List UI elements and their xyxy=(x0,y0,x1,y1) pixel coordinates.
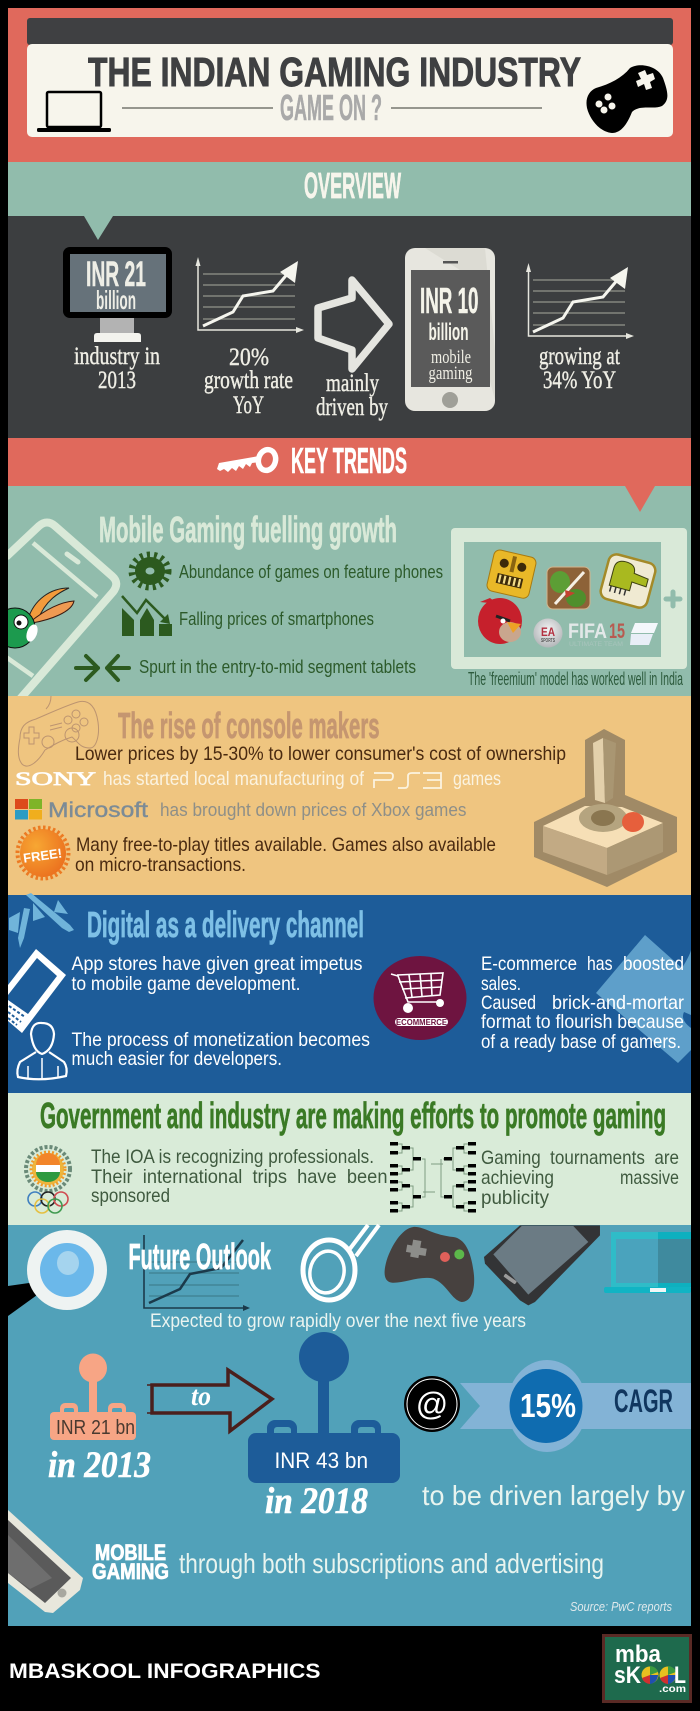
icon: monitor with INR 21 billion xyxy=(63,247,172,342)
icon: falling prices xyxy=(122,596,172,636)
text: free to play: on micro-transactions. xyxy=(75,854,246,876)
icon: doodle jump xyxy=(599,553,657,609)
large joystick 2018: INR 43 bn xyxy=(274,1448,368,1473)
logo: mbaskool xyxy=(604,1636,690,1702)
source note: Source: PwC reports xyxy=(570,1599,672,1614)
text: growing at 34% YoY: growing at xyxy=(539,343,620,370)
text: driven by: to be driven largely by xyxy=(422,1480,685,1511)
text: industry in 2013 xyxy=(74,343,160,394)
text: lower prices: Lower prices by 15-30% to lower consumer's cost of ownership xyxy=(75,743,566,765)
text: 20% growth rate YoY: 20% xyxy=(229,344,269,371)
panel: government and industry xyxy=(8,1093,691,1225)
heading: mobile gaming: Mobile Gaming fuelling growth xyxy=(99,509,397,550)
heading: future outlook: Future Outlook xyxy=(128,1236,272,1277)
icon: smartphone with INR 10 billion xyxy=(405,248,495,411)
tablet with game icons xyxy=(451,528,687,669)
icon: joystick xyxy=(534,729,677,887)
text: expected: Expected to grow rapidly over the next five years xyxy=(150,1310,526,1332)
icon: EA fifa logo: FIFA xyxy=(568,620,607,643)
icon: teal laptop xyxy=(604,1232,691,1293)
row: microsoft xyxy=(15,799,466,822)
logo: mbaskool: sK xyxy=(614,1662,642,1689)
text: IOA: The IOA is recognizing professionals. xyxy=(91,1146,374,1168)
text: ecommerce: brick-and-mortar xyxy=(552,992,684,1014)
panel: mobile gaming xyxy=(0,486,691,699)
icon: smartphone with INR 10 billion: INR 10 xyxy=(420,280,478,321)
icon: ecommerce cart xyxy=(374,956,466,1040)
large joystick 2018 xyxy=(248,1332,400,1483)
icon: dark gamepad xyxy=(385,1227,474,1302)
text: ecommerce: has xyxy=(587,953,613,975)
text: falling prices: Falling prices of smartphones xyxy=(179,608,374,629)
row: sony: has started local manufacturing of xyxy=(103,768,365,790)
subtitle: GAME ON ? xyxy=(280,87,382,128)
panel: overview stats xyxy=(8,216,691,438)
text: IOA xyxy=(91,1146,388,1207)
text: IOA: sponsored xyxy=(91,1185,170,1207)
icon: converging arrows xyxy=(76,656,129,680)
text: growing at 34% YoY xyxy=(539,343,620,394)
icon: controller outline xyxy=(18,696,99,766)
icon: EA fifa logo: EA xyxy=(541,625,555,639)
row: sony: games xyxy=(453,768,501,790)
icon: monitor with INR 21 billion: billion xyxy=(96,285,136,315)
logo: IOA xyxy=(26,1147,70,1213)
chart: tournament bracket xyxy=(390,1142,476,1212)
text: ecommerce: boosted xyxy=(623,953,684,975)
text: app stores: App stores have given great impetus xyxy=(72,953,363,975)
decorative diamond shape xyxy=(596,935,691,1063)
logo: mbaskool: L xyxy=(674,1662,686,1689)
icon: monitor with INR 21 billion: INR 21 xyxy=(86,255,146,294)
text: 20% growth rate YoY xyxy=(204,344,293,419)
text: IOA: Their international trips have been xyxy=(91,1166,388,1188)
row: microsoft: has brought down prices of Xbox games xyxy=(160,799,466,820)
text: growing at 34% YoY: 34% YoY xyxy=(543,367,616,394)
row: microsoft: Microsoft xyxy=(48,799,148,822)
text: in 2018: in 2018 xyxy=(265,1481,368,1522)
icon: developer xyxy=(17,1023,67,1079)
text: 20% growth rate YoY: growth rate xyxy=(204,367,293,394)
badge: at sign: @ xyxy=(416,1386,448,1422)
text: ecommerce: Caused xyxy=(481,992,536,1014)
text: 20% growth rate YoY: YoY xyxy=(233,392,264,419)
text: tournaments: massive xyxy=(620,1167,679,1189)
text: abundance: Abundance of games on feature phones xyxy=(179,561,443,582)
icon: temple run xyxy=(486,549,537,599)
icon: EA fifa logo: ULTIMATE TEAM xyxy=(569,642,623,648)
pointer xyxy=(84,216,113,240)
pointer xyxy=(625,486,655,512)
icon: free badge: FREE! xyxy=(22,845,63,866)
text: monetization: much easier for developers. xyxy=(72,1048,282,1070)
footer title: MBASKOOL INFOGRAPHICS xyxy=(9,1659,320,1683)
heading: overview: OVERVIEW xyxy=(304,165,401,206)
chart: outlook xyxy=(144,1235,250,1311)
text: ecommerce: format to flourish because xyxy=(481,1011,684,1033)
text: spurt: Spurt in the entry-to-mid segment tablets xyxy=(139,656,416,677)
icon: magnifier xyxy=(8,1230,107,1316)
text: ecommerce: E-commerce xyxy=(481,953,577,975)
text: mobile gaming: MOBILE xyxy=(95,1540,166,1565)
overview banner xyxy=(8,162,691,216)
icon: white phone xyxy=(8,1510,83,1613)
row: sony: SONY xyxy=(15,769,96,790)
text: mainly driven by: mainly xyxy=(326,370,379,397)
panel: future outlook xyxy=(8,1225,691,1626)
text: tournaments: publicity xyxy=(481,1187,549,1209)
text: industry in 2013: industry in xyxy=(74,343,160,370)
row: sony xyxy=(15,768,501,790)
text: mobile gaming: GAMING xyxy=(92,1559,169,1584)
panel: digital delivery xyxy=(8,893,691,1093)
icon: gamepad xyxy=(586,65,667,133)
ribbon: 15% CAGR: 15% xyxy=(520,1387,576,1424)
icon: fruit ninja xyxy=(547,567,590,609)
text: monetization: The process of monetization becomes xyxy=(72,1029,370,1051)
text: ecommerce: sales. xyxy=(481,973,521,995)
logo: mbaskool: .com xyxy=(659,1684,686,1695)
text: tournaments xyxy=(481,1147,679,1209)
small joystick 2013 xyxy=(50,1354,136,1440)
text: mobile gaming xyxy=(92,1540,169,1584)
icon: dark phone xyxy=(484,1225,600,1305)
text: app stores xyxy=(72,953,363,995)
heading: console makers: The rise of console makers xyxy=(118,705,380,746)
text: app stores: to mobile game development. xyxy=(72,973,300,995)
icon: smartphone with INR 10 billion: billion xyxy=(428,319,468,346)
panel: console makers xyxy=(8,696,691,895)
text: free to play: Many free-to-play titles available. Games also available xyxy=(76,834,496,856)
header panel xyxy=(8,8,691,162)
heading: key trends: KEY TRENDS xyxy=(291,440,407,481)
text: subscriptions: through both subscriptions and advertising xyxy=(179,1548,604,1579)
chart: growth 34% xyxy=(526,263,634,339)
icon: EA fifa logo xyxy=(534,618,658,648)
text: tournaments: achieving xyxy=(481,1167,554,1189)
chart: growth 20% xyxy=(196,257,304,333)
arrow: to: to xyxy=(191,1381,211,1411)
text: in 2013: in 2013 xyxy=(48,1445,151,1486)
icon: free badge xyxy=(18,828,68,878)
arrow: block xyxy=(318,280,389,369)
text: industry in 2013: 2013 xyxy=(98,367,136,394)
icon: laptop xyxy=(37,92,111,132)
small joystick 2013: INR 21 bn xyxy=(56,1417,135,1439)
icon: gear xyxy=(132,555,168,587)
icon: white mobile xyxy=(8,949,66,1033)
heading: digital: Digital as a delivery channel xyxy=(87,904,364,945)
icon: smartphone with INR 10 billion: gaming xyxy=(428,363,473,384)
icon: phone outline xyxy=(6,522,116,699)
key trends banner xyxy=(8,438,691,486)
badge: at sign xyxy=(404,1376,460,1432)
icon: ecommerce cart: ECOMMERCE xyxy=(396,1018,448,1027)
text: free to play xyxy=(75,834,496,876)
icon: angry bird xyxy=(478,598,522,644)
icon: pencils xyxy=(9,893,74,948)
text: ecommerce xyxy=(481,953,684,1053)
arrow: to xyxy=(147,1370,272,1431)
logo: mbaskool: mba xyxy=(615,1641,662,1668)
ribbon: 15% CAGR xyxy=(460,1360,691,1452)
text: mainly driven by: driven by xyxy=(316,394,388,421)
icon: EA fifa logo: SPORTS xyxy=(541,638,555,644)
icon: key xyxy=(217,448,278,472)
text: monetization xyxy=(72,1029,370,1070)
icon: smartphone with INR 10 billion: mobile xyxy=(431,347,471,368)
icon: rope ring xyxy=(303,1225,379,1300)
logo: PS3 xyxy=(374,773,441,788)
text: mainly driven by xyxy=(316,370,388,421)
icon: EA fifa logo: 15 xyxy=(609,620,625,643)
icon: green bird xyxy=(0,588,74,648)
